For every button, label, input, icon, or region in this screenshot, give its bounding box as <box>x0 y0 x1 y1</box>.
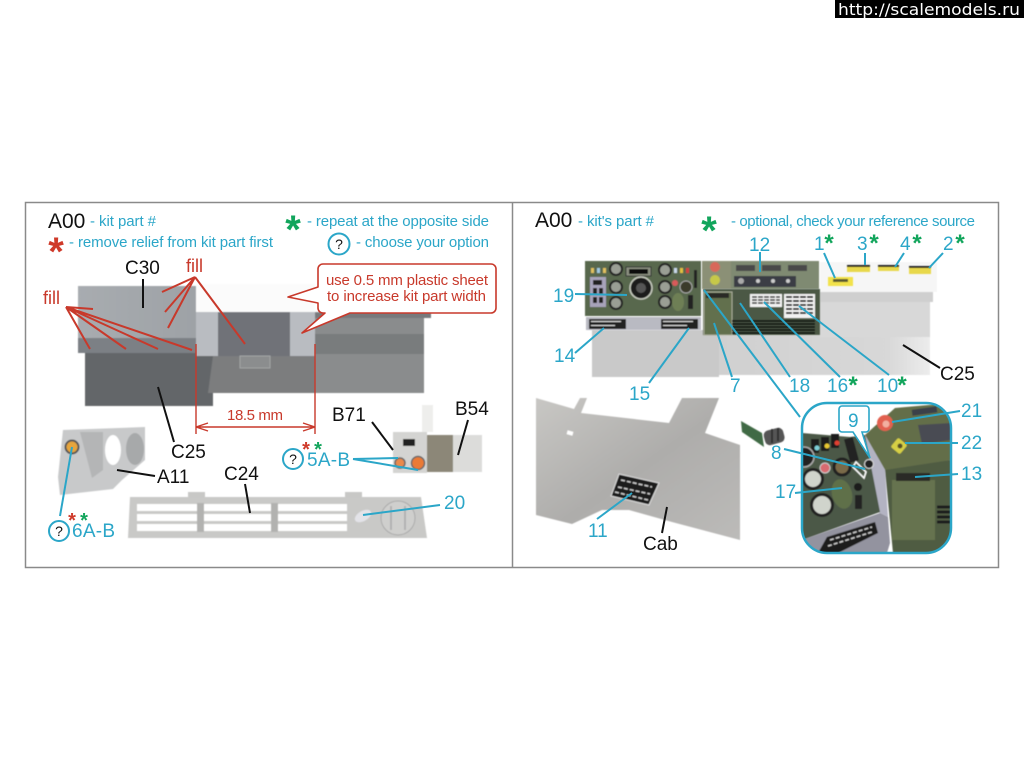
upper control panel <box>702 261 819 289</box>
label: 11: 11 <box>588 521 608 542</box>
label: 15 <box>629 328 689 405</box>
dimension: 18.5 mm: 18.5 mm <box>227 407 283 424</box>
label: 3 <box>857 230 879 265</box>
label: 21: 21 <box>961 401 982 422</box>
label: 18: 18 <box>789 376 810 397</box>
label: 14: 14 <box>554 346 576 367</box>
label: 16: * <box>848 372 858 399</box>
dimension: 18.5 mm <box>196 344 315 434</box>
legend: kit part number <box>48 210 157 233</box>
label: 4: * <box>912 230 922 257</box>
fill callout: left <box>43 288 192 350</box>
label: B54 <box>455 399 489 455</box>
legend: kit's part number: A00 <box>535 209 572 232</box>
legend: kit's part number <box>535 209 655 232</box>
label: 10: * <box>897 372 907 399</box>
label: C25: C25 <box>940 364 975 385</box>
legend: optional <box>701 209 975 253</box>
label: 10: 10 <box>877 376 898 397</box>
label: C24: C24 <box>224 464 259 485</box>
option: 5A-B: * <box>302 439 310 461</box>
part photo: C24 grille <box>128 492 427 538</box>
label: 17: 17 <box>775 482 796 503</box>
panel: right, cab parts <box>535 209 982 555</box>
part photo: B71 and B54 <box>393 405 482 473</box>
label: Cab: Cab <box>643 534 678 555</box>
legend: choose your option: ? <box>335 236 343 252</box>
label: 13: 13 <box>961 464 982 485</box>
lower control panel <box>703 289 820 335</box>
callout: plastic sheet <box>288 264 496 333</box>
watermark: http://scalemodels.ru <box>838 0 1020 19</box>
label: C24 <box>224 464 259 513</box>
option: 6A-B: * <box>68 510 76 532</box>
label: 2: 2 <box>943 234 954 255</box>
label: 18 <box>740 303 810 397</box>
label: C30: C30 <box>125 258 160 279</box>
legend: kit part number: A00 <box>48 210 85 233</box>
label: 19: 19 <box>553 286 574 307</box>
label: 15: 15 <box>629 384 650 405</box>
label: 16: 16 <box>827 376 848 397</box>
leader line: detail view <box>704 290 800 417</box>
legend: kit part number: - kit part # <box>90 213 157 230</box>
fill callout: upper <box>162 256 245 344</box>
label: A11 <box>117 467 189 488</box>
label: 20 <box>363 493 465 515</box>
label: 11 <box>588 493 632 542</box>
part photo: cab floor <box>536 398 740 540</box>
label: 2 <box>929 230 965 268</box>
label: C25: C25 <box>171 442 206 463</box>
label: 19 <box>553 286 627 307</box>
label: Cab <box>643 507 678 555</box>
label: 3: 3 <box>857 234 868 255</box>
label: 12: 12 <box>749 235 770 256</box>
label: 12 <box>749 235 770 272</box>
option: 5A-B: 5A-B <box>307 450 350 471</box>
label: 3: * <box>869 230 879 257</box>
part photo: C25 housing <box>592 262 937 377</box>
label: 1: * <box>824 230 834 257</box>
callout: plastic sheet: to increase kit part width <box>327 288 486 305</box>
label: A11: A11 <box>157 467 189 488</box>
callout: 9: 9 <box>848 411 859 432</box>
label: 10 <box>799 306 907 399</box>
callout: 9 <box>839 406 870 458</box>
yellow placards <box>828 265 931 286</box>
panel: left, kit part assembly <box>43 208 496 542</box>
option: 6A-B <box>49 447 115 542</box>
label: C25 <box>903 345 975 385</box>
legend: remove relief first: * <box>48 230 64 274</box>
label: 8: 8 <box>771 443 782 464</box>
label: 20: 20 <box>444 493 465 514</box>
icon: small lever detail <box>741 421 786 447</box>
label: B71 <box>332 405 393 450</box>
fill callout: left: fill <box>43 288 60 308</box>
label: 1 <box>814 230 835 278</box>
label: 17 <box>775 482 842 503</box>
label: C30 <box>125 258 160 308</box>
label: 21 <box>892 401 982 422</box>
legend: optional: - optional, check your reference source <box>731 213 975 230</box>
legend: repeat at the opposite side <box>285 208 489 252</box>
legend: choose your option: - choose your option <box>356 234 489 251</box>
legend: choose your option <box>328 234 489 254</box>
option: 6A-B: * <box>80 510 88 532</box>
label: 1: 1 <box>814 234 825 255</box>
label: 14 <box>554 328 604 367</box>
label: 16 <box>764 302 858 399</box>
part photo: C25 and C30 housing <box>78 284 431 406</box>
callout: plastic sheet: use 0.5 mm plastic sheet <box>326 272 489 289</box>
inset: close-up detail <box>794 403 951 553</box>
label: 7: 7 <box>730 376 741 397</box>
fill callout: upper: fill <box>186 256 203 276</box>
strip with placards <box>586 317 701 330</box>
option: 5A-B: ? <box>289 451 297 467</box>
dashboard panel: gauges <box>585 261 701 316</box>
label: B71: B71 <box>332 405 366 426</box>
label: 7 <box>714 323 741 397</box>
instruction sheet frame <box>26 202 998 568</box>
label: 4 <box>895 230 922 267</box>
option: 5A-B <box>283 439 418 471</box>
part photo: A11 <box>58 427 145 495</box>
label: 8 <box>771 443 865 469</box>
option: 6A-B: ? <box>55 523 63 539</box>
label: C25 <box>158 387 206 463</box>
label: 2: * <box>955 230 965 257</box>
legend: remove relief first <box>48 230 274 274</box>
label: 4: 4 <box>900 234 911 255</box>
legend: optional: * <box>701 209 717 253</box>
label: 13 <box>915 464 982 485</box>
option: 6A-B: 6A-B <box>72 521 115 542</box>
label: B54: B54 <box>455 399 489 420</box>
legend: remove relief first: - remove relief from kit part first <box>69 234 274 251</box>
option: 5A-B: * <box>314 439 322 461</box>
legend: repeat at the opposite side: * <box>285 208 301 252</box>
label: 22: 22 <box>961 433 982 454</box>
legend: kit's part number: - kit's part # <box>578 213 655 230</box>
label: 22 <box>905 433 982 454</box>
legend: repeat at the opposite side: - repeat at the opposite side <box>307 213 489 230</box>
